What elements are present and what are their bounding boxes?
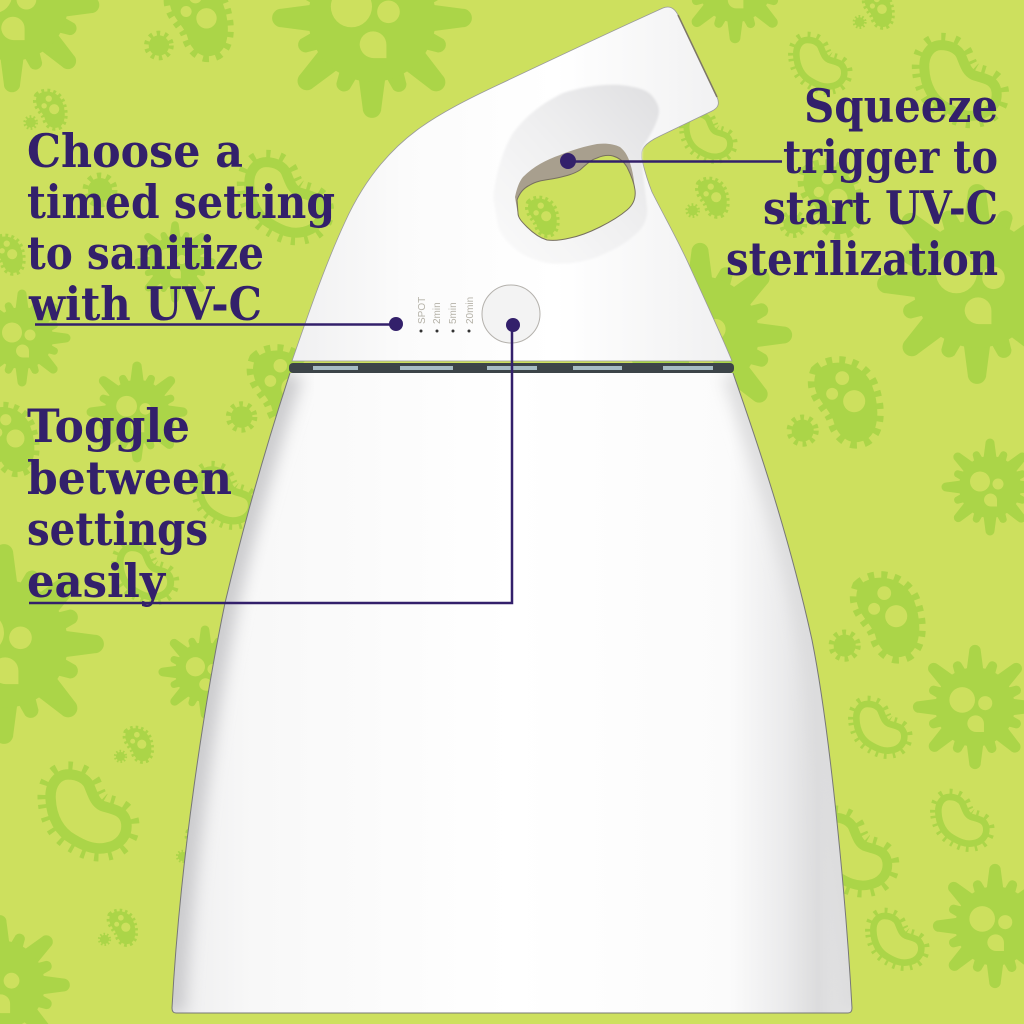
callout text: trigger: Squeeze	[804, 79, 998, 133]
handle opening	[517, 155, 635, 240]
setting labels: 5min	[448, 302, 459, 324]
callout: timed setting	[27, 124, 403, 331]
UV light band	[289, 363, 734, 373]
callout text: timed setting: Choose a	[27, 124, 243, 178]
setting labels: 2min	[432, 302, 443, 324]
leader line: timed setting	[35, 323, 396, 326]
leader line: trigger	[568, 160, 782, 163]
toggle button	[482, 285, 540, 343]
callout text: toggle: between	[27, 451, 232, 505]
callout text: toggle: settings	[27, 502, 208, 556]
callout text: timed setting: with UV-C	[28, 277, 262, 331]
nozzle tip edge	[678, 15, 717, 97]
callout text: timed setting: to sanitize	[27, 226, 264, 280]
device upper body and nozzle	[292, 7, 732, 361]
callout: toggle	[27, 318, 520, 608]
callout text: trigger: start UV-C	[763, 181, 998, 235]
callout text: timed setting: timed setting	[27, 175, 335, 229]
callout: trigger	[560, 79, 1014, 286]
setting labels: SPOT	[417, 297, 428, 324]
callout text: toggle: easily	[27, 554, 166, 608]
callout text: toggle: Toggle	[27, 399, 190, 453]
trigger	[515, 144, 635, 225]
setting labels: 20min	[465, 297, 476, 324]
germ seen through opening	[528, 199, 556, 234]
leader line: toggle	[29, 325, 512, 603]
grip recess	[493, 85, 659, 264]
device: UV-C sanitizer wand	[172, 7, 852, 1013]
device lower body	[172, 373, 852, 1013]
setting labels	[417, 297, 476, 332]
